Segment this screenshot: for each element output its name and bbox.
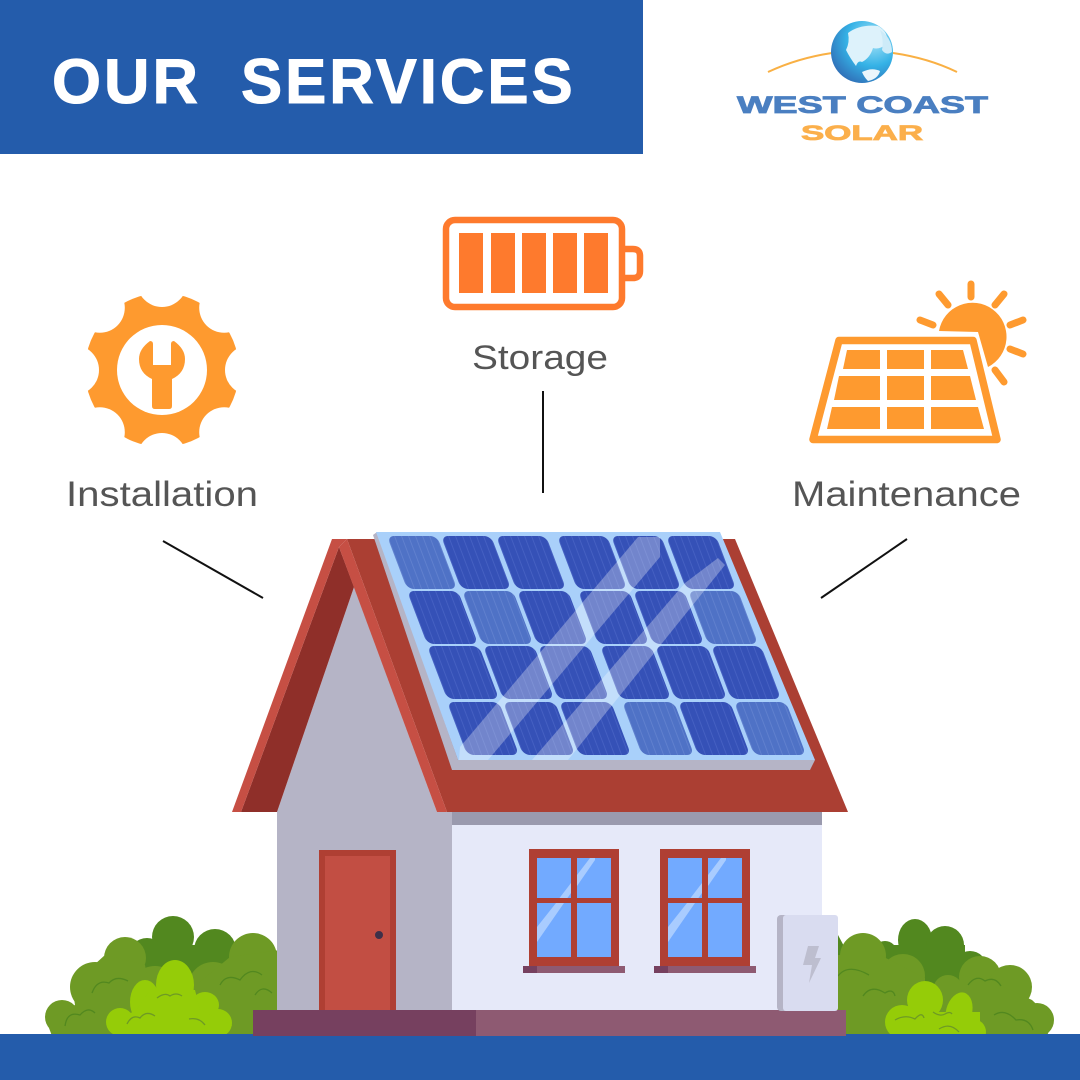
label: Storage: Storage xyxy=(472,339,608,377)
connector: Storage xyxy=(542,391,544,493)
label: Installation: Installation xyxy=(66,475,258,514)
connector: Installation xyxy=(163,541,263,598)
logo: West Coast Solar xyxy=(737,21,989,145)
title: SERVICES xyxy=(241,47,576,117)
right window xyxy=(654,849,756,973)
left bush xyxy=(45,916,280,1037)
left window xyxy=(523,849,625,973)
right bush xyxy=(835,919,1054,1045)
logo wordmark: West Coast: WEST COAST xyxy=(737,92,989,119)
left roof fascia xyxy=(232,539,347,812)
connector: Maintenance xyxy=(821,539,907,598)
ground band xyxy=(0,1034,1080,1080)
wall battery unit xyxy=(777,915,838,1011)
house xyxy=(232,532,848,1036)
title: OUR xyxy=(52,47,201,117)
logo wordmark: Solar: SOLAR xyxy=(801,122,923,145)
gable roof underside xyxy=(241,547,354,812)
panel cells xyxy=(387,536,806,755)
title xyxy=(52,47,576,117)
main roof xyxy=(347,539,848,812)
logo globe xyxy=(831,21,893,83)
label: Maintenance: Maintenance xyxy=(792,475,1021,514)
icon: gear with wrench xyxy=(49,257,275,483)
icon: battery xyxy=(446,220,640,307)
solar panel xyxy=(373,532,815,770)
front wall xyxy=(452,812,822,1010)
gable wall xyxy=(277,587,452,1010)
panel reflections xyxy=(459,537,725,760)
logo horizon arc xyxy=(768,53,957,72)
doorstep xyxy=(253,1010,846,1036)
eaves shadow xyxy=(452,812,822,825)
header banner xyxy=(0,0,643,154)
panel side xyxy=(373,532,815,770)
icon: solar panel with sun xyxy=(813,284,1023,440)
door xyxy=(319,850,396,1010)
roof edge fascia xyxy=(339,539,447,812)
panel frame xyxy=(376,532,815,760)
